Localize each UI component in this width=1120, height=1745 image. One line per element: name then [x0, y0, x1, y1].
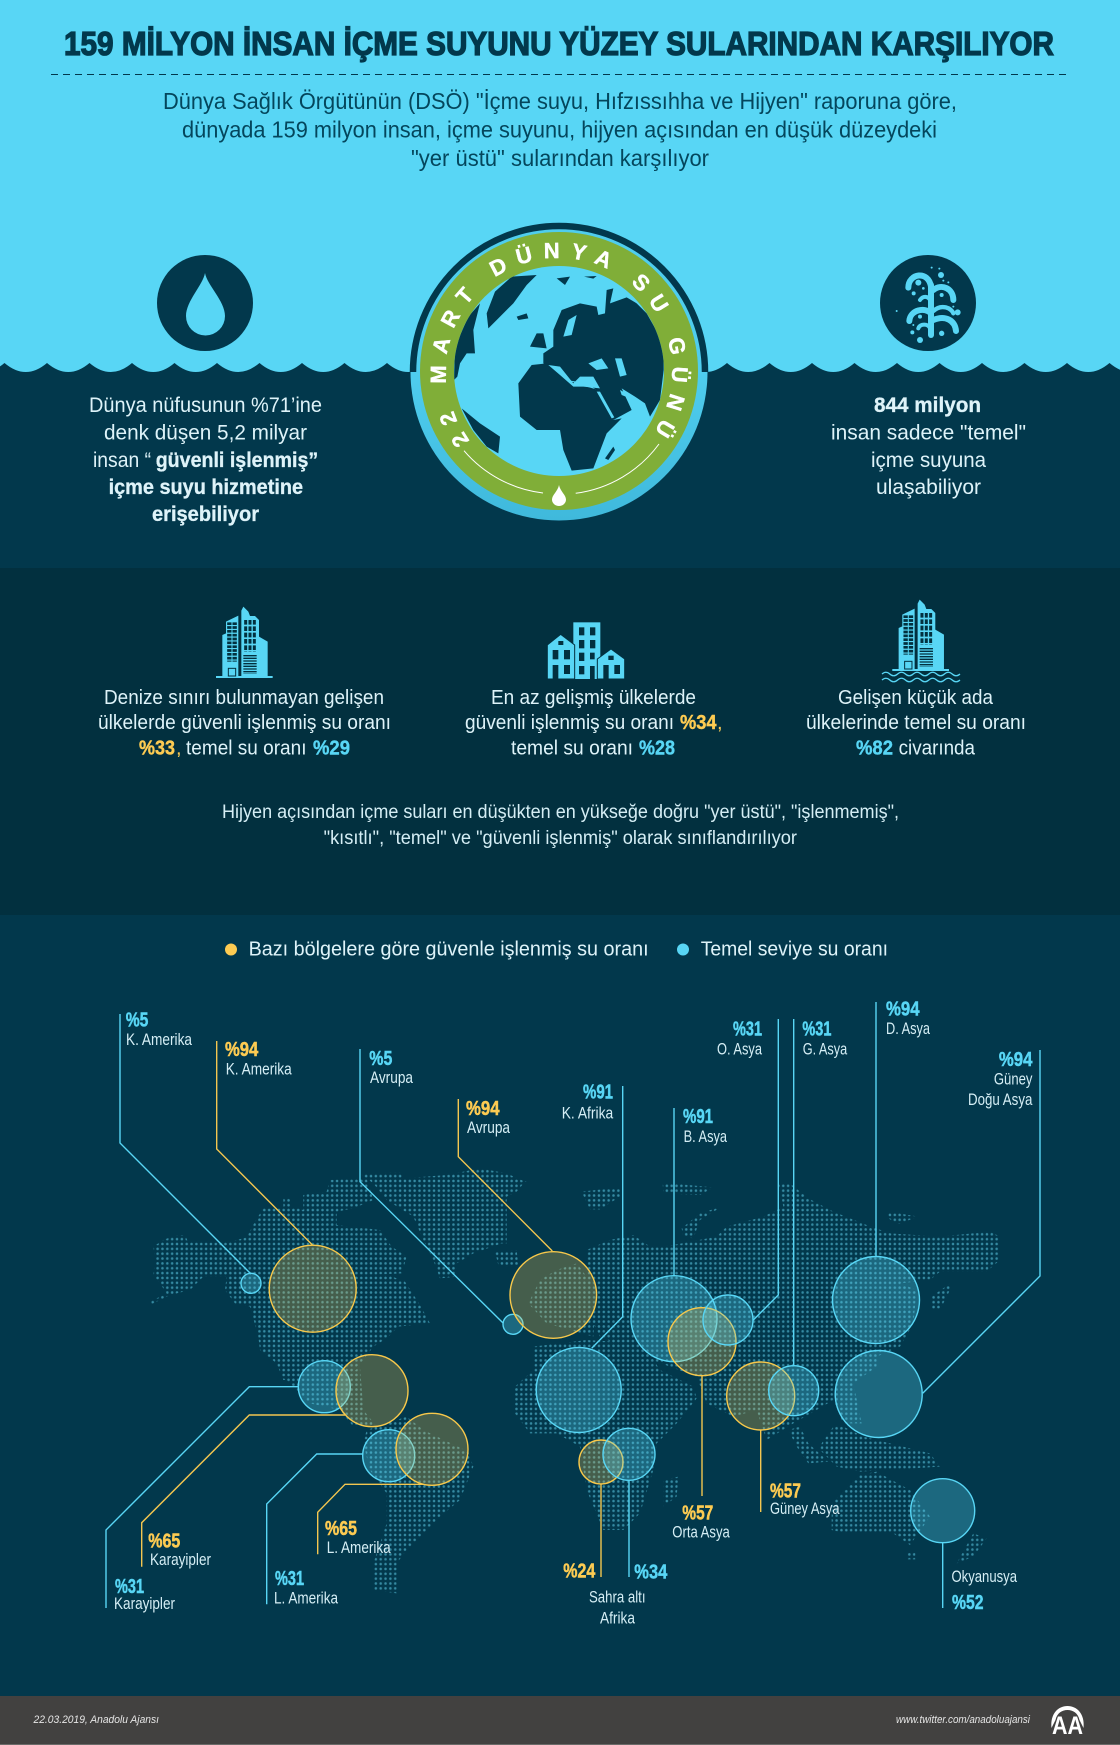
text: least developed countries: %34: [680, 712, 717, 734]
callout: Karayipler safe: [142, 1355, 408, 1569]
text: basic water: [831, 394, 1026, 499]
callout: Karayipler basic: [106, 1361, 350, 1613]
callout: Güney Asya: [727, 1362, 840, 1518]
callout: L. Amerika basic: [267, 1430, 415, 1608]
text: safely managed water: insan “: [93, 449, 151, 472]
callout: Karayipler basic: %31: [115, 1576, 144, 1598]
callout: O. Asya: [703, 1019, 778, 1345]
icon: water drop: [157, 255, 253, 351]
background: sky: [0, 0, 1120, 570]
callout: K. Afrika: K. Afrika: [562, 1105, 614, 1123]
curved label: [446, 258, 672, 458]
callout: K. Amerika safe: %94: [225, 1039, 259, 1061]
text: safely managed water: güvenli işlenmiş”: [156, 449, 318, 472]
legend: Temel seviye su oranı: [701, 938, 888, 960]
callout: G. Asya: G. Asya: [803, 1040, 848, 1058]
callout: L. Amerika safe: %65: [325, 1518, 357, 1540]
text: landlocked developing countries: [98, 687, 391, 760]
callout: Okyanusya: [911, 1479, 1018, 1614]
legend: Bazı bölgelere göre güvenle işlenmiş su oranı: [249, 938, 649, 960]
text: safely managed water: Dünya nüfusunun %71’ine: [89, 394, 322, 417]
icon: AA logo: AA: [1052, 1712, 1083, 1740]
text: safely managed water: denk düşen 5,2 milyar: [104, 422, 307, 444]
text: hygiene classification: [222, 802, 899, 849]
footer: www.twitter.com/anadoluajansi: [896, 1714, 1030, 1726]
text: landlocked developing countries: Denize sınırı bulunmayan gelişen: [104, 687, 384, 709]
intro text: dünyada 159 milyon insan, içme suyunu, hijyen açısından en düşük düzeydeki: [182, 116, 937, 142]
callout: Güney Doğu Asya: [835, 1049, 1040, 1438]
badge: 22 Mart Dünya Su Günü: [410, 222, 708, 520]
callout: Avrupa basic: [360, 1048, 523, 1334]
callout: Orta Asya: [668, 1308, 736, 1541]
callout: Avrupa safe: Avrupa: [467, 1119, 511, 1137]
text: small island developing states: Gelişen küçük ada: [838, 687, 994, 709]
callout: Güney Doğu Asya: %94: [999, 1049, 1033, 1071]
footer: 22.03.2019, Anadolu Ajansı: [33, 1714, 159, 1726]
icon: houses: [547, 622, 625, 679]
callout: D. Asya: [832, 999, 931, 1344]
callout: Orta Asya: Orta Asya: [672, 1523, 730, 1541]
icon: fountain: [880, 255, 976, 351]
text: least developed countries: %28: [639, 738, 675, 760]
callout: K. Amerika safe: [217, 1039, 356, 1332]
text: landlocked developing countries: temel su oranı: [186, 738, 306, 760]
panel: map band: [0, 915, 1120, 1696]
callout: Güney Doğu Asya: Güney: [994, 1071, 1033, 1089]
panel: statistics band: [0, 568, 1120, 915]
callout: Orta Asya: %57: [682, 1502, 713, 1524]
callout: K. Amerika basic: [120, 1010, 261, 1293]
text: small island developing states: civarında: [899, 738, 976, 760]
intro text: [163, 88, 957, 171]
text: landlocked developing countries: %29: [313, 738, 350, 760]
callout: Güney Asya: %57: [770, 1481, 801, 1503]
text: safely managed water: [89, 394, 322, 526]
callout: L. Amerika basic: %31: [275, 1568, 304, 1590]
callout: Sahra altı Afrika: Afrika: [600, 1609, 636, 1627]
callout: Okyanusya: %52: [952, 1592, 984, 1614]
dotted world map: [151, 1170, 998, 1594]
text: least developed countries: ,: [717, 712, 723, 734]
intro text: Dünya Sağlık Örgütünün (DSÖ) "İçme suyu, Hıfzıssıhha ve Hijyen" raporuna göre,: [163, 88, 957, 114]
callout: B. Asya: %91: [683, 1106, 713, 1128]
callout: L. Amerika safe: L. Amerika: [327, 1539, 391, 1557]
text: small island developing states: [806, 687, 1026, 760]
text: least developed countries: En az gelişmiş ülkelerde: [491, 687, 696, 709]
callout: K. Afrika: [536, 1082, 623, 1432]
text: least developed countries: temel su oranı: [511, 738, 633, 760]
callout: G. Asya: [769, 1019, 848, 1416]
legend: [225, 938, 888, 960]
callout: Karayipler basic: Karayipler: [114, 1595, 175, 1613]
callout: Güney Doğu Asya: Doğu Asya: [968, 1091, 1033, 1109]
icon: tower: [216, 607, 273, 678]
text: basic water: içme suyuna: [871, 449, 986, 472]
callout: B. Asya: [631, 1106, 728, 1362]
callout: D. Asya: %94: [886, 999, 920, 1021]
intro text: "yer üstü" sularından karşılıyor: [411, 145, 709, 171]
callout: Avrupa basic: Avrupa: [370, 1069, 414, 1087]
text: least developed countries: [465, 687, 723, 760]
callout: O. Asya: O. Asya: [717, 1040, 763, 1058]
text: hygiene classification: "kısıtlı", "temel" ve "güvenli işlenmiş" olarak sınıflandırılıyor: [324, 828, 798, 849]
text: landlocked developing countries: ,: [176, 738, 182, 760]
callout: G. Asya: %31: [802, 1019, 831, 1041]
callout: Avrupa safe: %94: [466, 1098, 500, 1120]
callout: K. Amerika basic: K. Amerika: [126, 1031, 193, 1049]
footer: [0, 1696, 1120, 1745]
callout: O. Asya: %31: [733, 1019, 762, 1041]
callout: Avrupa basic: %5: [369, 1048, 392, 1070]
callout: L. Amerika safe: [318, 1413, 468, 1557]
callout: B. Asya: B. Asya: [684, 1128, 728, 1146]
callout: Sahra altı Afrika: %24: [563, 1560, 596, 1582]
callout: Sahra altı Afrika: %34: [634, 1561, 668, 1583]
text: small island developing states: %82: [856, 738, 893, 760]
callout: K. Amerika safe: K. Amerika: [226, 1060, 292, 1078]
text: basic water: insan sadece "temel": [831, 422, 1026, 444]
text: basic water: 844 milyon: [874, 394, 981, 417]
callout: K. Afrika: %91: [583, 1082, 613, 1104]
text: small island developing states: ülkelerinde temel su oranı: [806, 712, 1026, 734]
callout: Karayipler safe: %65: [148, 1531, 180, 1553]
callout: K. Amerika basic: %5: [126, 1010, 148, 1032]
callout: Avrupa safe: [458, 1098, 597, 1338]
text: least developed countries: güvenli işlenmiş su oranı: [465, 712, 674, 734]
callout: Okyanusya: Okyanusya: [952, 1568, 1018, 1586]
callout: Karayipler safe: Karayipler: [150, 1551, 211, 1569]
callout: D. Asya: D. Asya: [886, 1020, 931, 1038]
callout: Güney Asya: Güney Asya: [770, 1500, 840, 1518]
text: hygiene classification: Hijyen açısından içme suları en düşükten en yükseğe doğru "yer üstü", "işlenmemiş",: [222, 802, 899, 823]
callout: Sahra altı Afrika: [563, 1428, 668, 1627]
dark water with wave edge: [0, 363, 1120, 570]
text: basic water: ulaşabiliyor: [876, 476, 981, 499]
badge: 22 Mart Dünya Su Günü: 22 MART DÜNYA SU GÜNÜ: [430, 242, 692, 447]
callout: L. Amerika basic: L. Amerika: [274, 1590, 339, 1608]
globe land: [454, 275, 664, 471]
text: safely managed water: içme suyu hizmetine: [109, 476, 303, 499]
callout: Sahra altı Afrika: Sahra altı: [589, 1589, 646, 1607]
text: safely managed water: erişebiliyor: [152, 503, 259, 526]
text: landlocked developing countries: %33: [139, 738, 175, 760]
icon: tower on water: [882, 600, 960, 682]
text: landlocked developing countries: ülkelerde güvenli işlenmiş su oranı: [98, 712, 391, 734]
